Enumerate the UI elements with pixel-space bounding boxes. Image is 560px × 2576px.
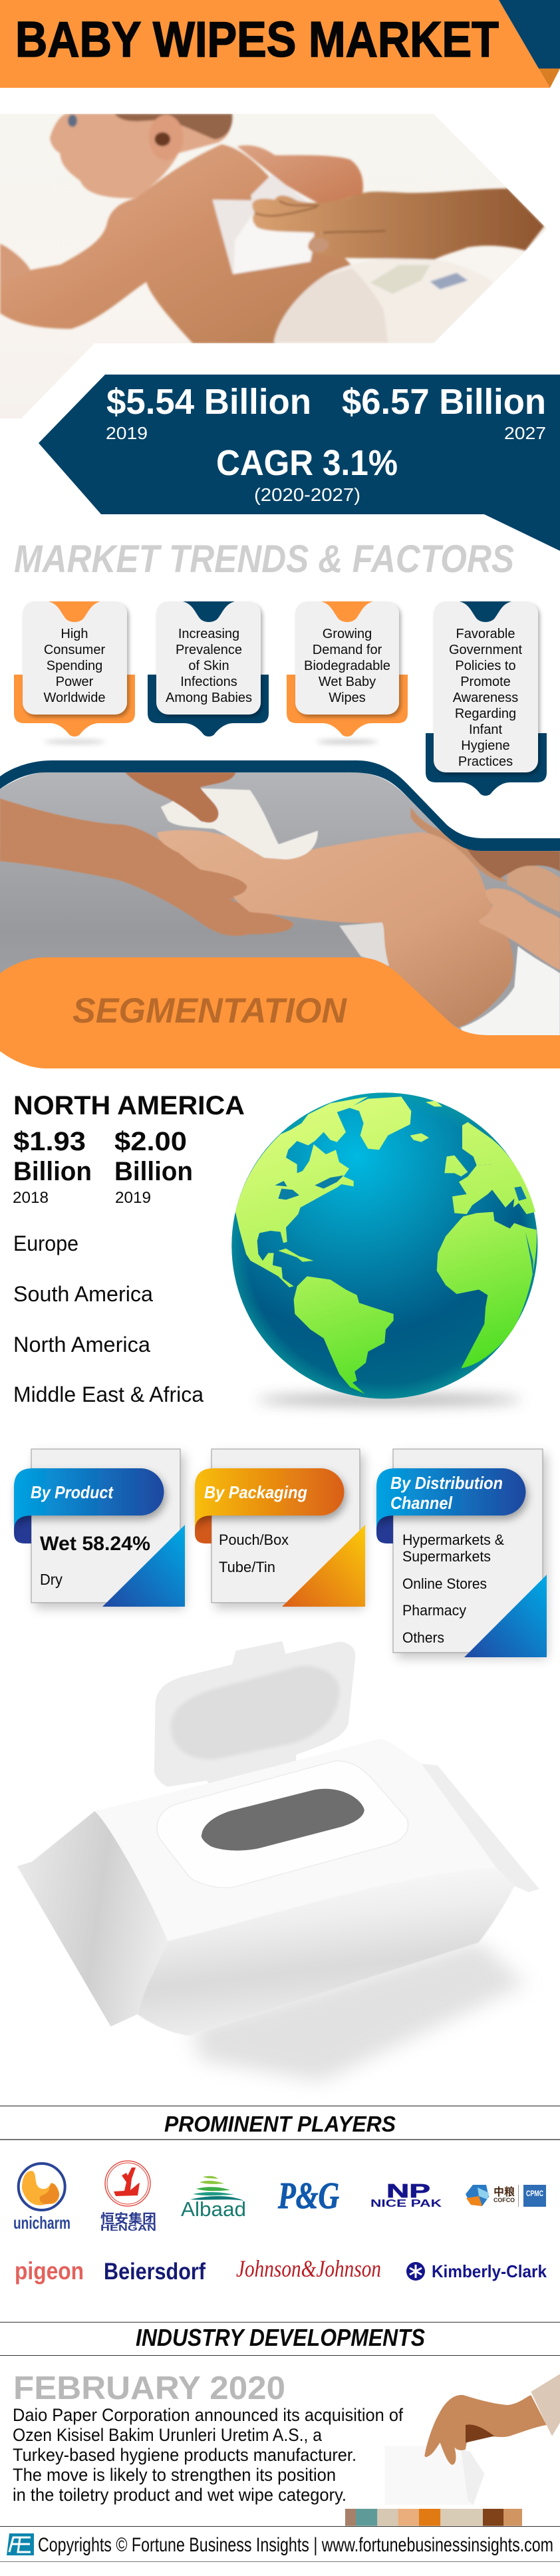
CAGR: (2020-2027) xyxy=(254,484,360,505)
trend card 2: Infections xyxy=(180,675,237,689)
Scandinavia xyxy=(462,1122,493,1166)
logo: pigeon: pigeon xyxy=(15,2257,84,2285)
packaging values xyxy=(219,1531,289,1575)
region list: Europe xyxy=(13,1231,78,1255)
logo: cofco cpmc: COFCO xyxy=(493,2197,515,2203)
development paragraph: Daio Paper Corporation announced its acquisition of xyxy=(13,2405,403,2425)
value 2027 xyxy=(342,382,546,443)
panel: trend cards xyxy=(14,601,547,796)
adult hand on top xyxy=(125,772,235,822)
logo: beiersdorf: Beiersdorf xyxy=(104,2259,206,2285)
value 2019: 2019 xyxy=(115,1189,151,1207)
trend card 3 xyxy=(287,601,408,744)
folded corner xyxy=(282,1525,365,1607)
panel: by distribution channel xyxy=(376,1449,547,1657)
region list: South America xyxy=(13,1282,153,1306)
panel: by product xyxy=(14,1449,185,1607)
product values: Dry xyxy=(40,1571,63,1588)
navy curved band xyxy=(0,760,560,851)
trend card 3: Biodegradable xyxy=(304,659,390,673)
panel: by packaging xyxy=(195,1449,365,1607)
development paragraph: The move is likely to strengthen its position xyxy=(13,2465,336,2485)
title banner xyxy=(0,0,560,88)
product values: Wet 58.24% xyxy=(40,1533,150,1555)
regional text block xyxy=(13,1091,245,1406)
trend card 3: Wet Baby xyxy=(319,675,376,689)
UK xyxy=(444,1156,468,1176)
trend card 4: Practices xyxy=(458,754,513,769)
logo: nice-pak xyxy=(370,2181,442,2209)
channel values: Others xyxy=(402,1629,444,1646)
folded corner xyxy=(102,1525,185,1607)
adult hand xyxy=(252,188,544,259)
ribbon: by distribution channel: Channel xyxy=(390,1493,453,1513)
heading: prominent players: PROMINENT PLAYERS xyxy=(164,2112,396,2136)
globe xyxy=(231,1092,537,1404)
ribbon: by product: By Product xyxy=(31,1482,114,1502)
logo: P&G: P&G xyxy=(277,2175,339,2217)
development text: FEBRUARY 2020 xyxy=(13,2370,285,2406)
trend card 4: Hygiene xyxy=(461,738,510,753)
development paragraph xyxy=(13,2405,403,2505)
logo: hengan: HENGAN xyxy=(100,2223,156,2233)
ribbon: by distribution channel: By Distribution xyxy=(390,1473,503,1493)
baby leg xyxy=(157,830,513,1027)
Iceland xyxy=(410,1133,429,1142)
channel values: Supermarkets xyxy=(402,1548,491,1565)
segmentation banner xyxy=(0,957,560,1068)
value 2027: $6.57 Billion xyxy=(342,382,546,422)
trend card 2 xyxy=(148,601,269,736)
logo: nice-pak: NP xyxy=(386,2181,430,2202)
value 2019 xyxy=(114,1127,193,1207)
market size banner xyxy=(39,375,560,551)
logo: cofco cpmc: 中粮 xyxy=(493,2185,515,2198)
trend card 1: Power xyxy=(56,675,94,689)
diaper xyxy=(323,257,491,341)
development paragraph: in the toiletry product and wet wipe category. xyxy=(13,2485,347,2505)
value 2018: 2018 xyxy=(13,1189,49,1207)
logo: hengan xyxy=(100,2161,156,2233)
development paragraph: Ozen Kisisel Bakim Urunleri Uretim A.S., a xyxy=(13,2425,323,2445)
logo: johnson & johnson: Johnson&Johnson xyxy=(236,2255,381,2282)
ribbon: by packaging xyxy=(195,1468,345,1543)
value 2019 xyxy=(106,382,311,443)
logo: cofco cpmc: CPMC xyxy=(526,2189,543,2198)
photo: baby being wiped xyxy=(0,114,560,420)
heading: segmentation: SEGMENTATION xyxy=(72,991,348,1031)
value 2019: Billion xyxy=(114,1157,193,1186)
region list xyxy=(13,1231,204,1406)
icon: fortune logo xyxy=(7,2533,34,2555)
channel values: Online Stores xyxy=(402,1575,487,1592)
heading: industry developments: INDUSTRY DEVELOPMENTS xyxy=(136,2324,425,2351)
regional text block: NORTH AMERICA xyxy=(13,1091,245,1120)
logo: unicharm: unicharm xyxy=(13,2213,70,2233)
footer xyxy=(0,2526,560,2562)
trend card 4: Promote xyxy=(460,675,511,689)
CAGR: CAGR 3.1% xyxy=(216,443,398,483)
trend card 1: Worldwide xyxy=(44,691,105,705)
packaging values: Pouch/Box xyxy=(219,1531,289,1548)
trend card 1: Spending xyxy=(47,659,102,673)
value 2018: Billion xyxy=(13,1157,92,1186)
logo: albaad xyxy=(181,2176,246,2221)
trend card 4: Government xyxy=(449,643,522,657)
logo: hengan: 恒安集团 xyxy=(100,2211,156,2227)
South America xyxy=(294,1276,394,1394)
trend card 3: Demand for xyxy=(313,643,382,657)
trend card 1 xyxy=(14,601,135,744)
title: BABY WIPES MARKET xyxy=(15,11,499,67)
photo: foot being wiped xyxy=(0,770,560,1041)
packaging values: Tube/Tin xyxy=(219,1559,275,1575)
region list: North America xyxy=(13,1333,150,1357)
ribbon: by product xyxy=(14,1468,164,1543)
trend card 4: Awareness xyxy=(453,691,518,705)
Caribbean xyxy=(278,1249,314,1262)
channel values: Pharmacy xyxy=(402,1602,466,1619)
Europe xyxy=(452,1138,535,1214)
folded corner xyxy=(464,1575,547,1657)
development text xyxy=(13,2370,403,2505)
trend card 2: Among Babies xyxy=(166,691,252,705)
region list: Middle East & Africa xyxy=(13,1382,204,1406)
trend card 4: Favorable xyxy=(456,627,515,641)
adult arm xyxy=(0,798,293,936)
product values xyxy=(40,1533,150,1588)
value 2019: 2019 xyxy=(106,423,148,443)
trend card 4: Infant xyxy=(469,723,502,737)
trend card 1: High xyxy=(61,627,88,641)
value 2018 xyxy=(13,1127,92,1207)
value 2018: $1.93 xyxy=(13,1127,86,1156)
trend card 4: Policies to xyxy=(455,659,516,673)
trend card 2: of Skin xyxy=(188,659,229,673)
value 2019: $5.54 Billion xyxy=(106,382,311,422)
ribbon: by packaging: By Packaging xyxy=(204,1482,307,1502)
trend card 3: Growing xyxy=(323,627,372,641)
photo: hand and tissue box xyxy=(345,2374,560,2526)
channel values xyxy=(402,1531,504,1646)
trend card 2: Prevalence xyxy=(176,643,242,657)
value 2019: $2.00 xyxy=(114,1127,187,1156)
wipe in hand xyxy=(161,788,318,860)
wipe xyxy=(212,174,315,274)
trend card 2: Increasing xyxy=(178,627,239,641)
logo: unicharm xyxy=(13,2164,70,2233)
channel values: Hypermarkets & xyxy=(402,1531,504,1548)
trend card 4: Regarding xyxy=(455,707,516,721)
trend card 1: Consumer xyxy=(44,643,105,657)
logo: kimberly-clark: Kimberly-Clark xyxy=(432,2261,547,2281)
logo: cofco cpmc xyxy=(466,2185,546,2207)
wipes pack xyxy=(17,1641,539,2082)
CAGR xyxy=(216,443,398,505)
ribbon: by distribution channel xyxy=(376,1468,525,1543)
North America xyxy=(235,1096,368,1287)
Africa xyxy=(437,1212,537,1368)
trend card 4 xyxy=(426,601,547,796)
value 2027: 2027 xyxy=(504,423,546,443)
trend card 3: Wipes xyxy=(329,691,366,705)
logo: albaad: Albaad xyxy=(181,2197,246,2221)
development paragraph: Turkey-based hygiene products manufacturer. xyxy=(13,2445,356,2465)
Greenland xyxy=(349,1096,411,1150)
logo: nice-pak: NICE PAK xyxy=(370,2198,442,2209)
